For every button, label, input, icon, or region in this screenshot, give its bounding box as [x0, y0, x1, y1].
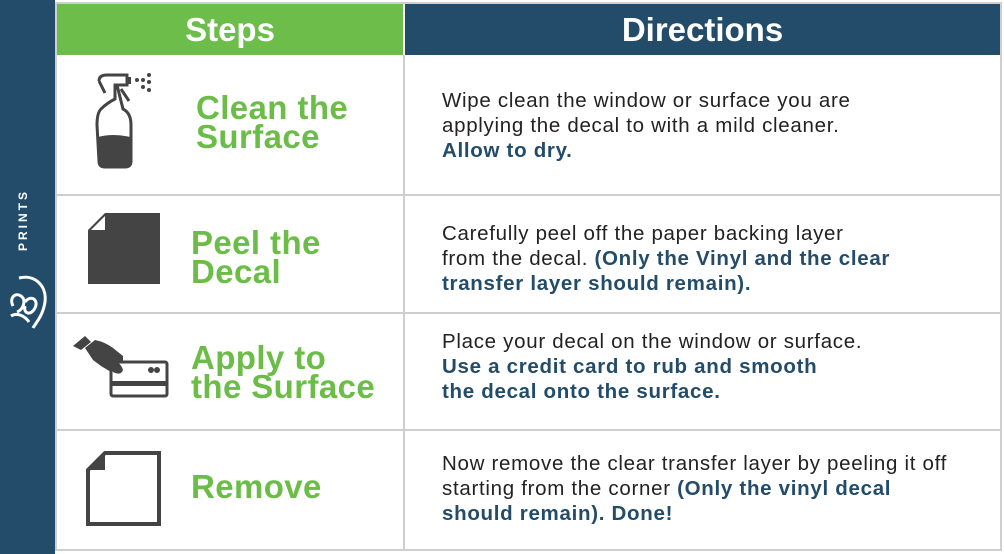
directions 1 — [442, 89, 851, 162]
directions 4: Now remove the clear transfer layer by peeling it off — [442, 452, 947, 475]
directions 3: Place your decal on the window or surface. — [442, 330, 862, 353]
step title: Surface — [196, 118, 320, 155]
directions 3: the decal onto the surface. — [442, 380, 721, 403]
logo mark — [10, 276, 47, 329]
directions 2: transfer layer should remain). — [442, 272, 751, 295]
logo text: PRINTS: PRINTS — [16, 189, 30, 251]
row 2: peel — [88, 213, 321, 290]
header: Steps: Steps — [185, 11, 275, 48]
directions 2: Carefully peel off the paper backing layer — [442, 222, 844, 245]
icon: empty sheet — [86, 451, 161, 526]
icon: peeled sheet — [88, 213, 160, 284]
directions 4 — [442, 452, 947, 525]
step title: the Surface — [191, 368, 375, 405]
directions 1: Wipe clean the window or surface you are — [442, 89, 851, 112]
step title — [196, 89, 348, 155]
step title: Remove — [191, 468, 322, 505]
directions 2 — [442, 222, 890, 295]
step title: Peel the — [191, 224, 321, 261]
header: Directions — [405, 4, 1000, 55]
directions 1: Allow to dry. — [442, 139, 573, 162]
directions 4: should remain). Done! — [442, 502, 673, 525]
row 4: remove — [86, 451, 322, 526]
directions 2: from the decal. (Only the Vinyl and the clear — [442, 247, 890, 270]
step title — [191, 224, 321, 290]
row 1: clean — [96, 73, 348, 168]
icon: hand with card — [73, 336, 168, 398]
directions 3 — [442, 330, 862, 403]
icon: spray bottle — [96, 73, 151, 168]
step title: Clean the — [196, 89, 348, 126]
directions 1: applying the decal to with a mild cleaner. — [442, 114, 839, 137]
header: Directions: Directions — [622, 11, 783, 48]
row 3: apply — [73, 336, 375, 405]
directions 3: Use a credit card to rub and smooth — [442, 355, 817, 378]
header: Steps — [57, 4, 403, 55]
step title: Apply to — [191, 339, 326, 376]
step title: Decal — [191, 253, 281, 290]
step title — [191, 339, 375, 405]
directions 4: starting from the corner (Only the vinyl decal — [442, 477, 891, 500]
sidebar — [0, 0, 55, 554]
